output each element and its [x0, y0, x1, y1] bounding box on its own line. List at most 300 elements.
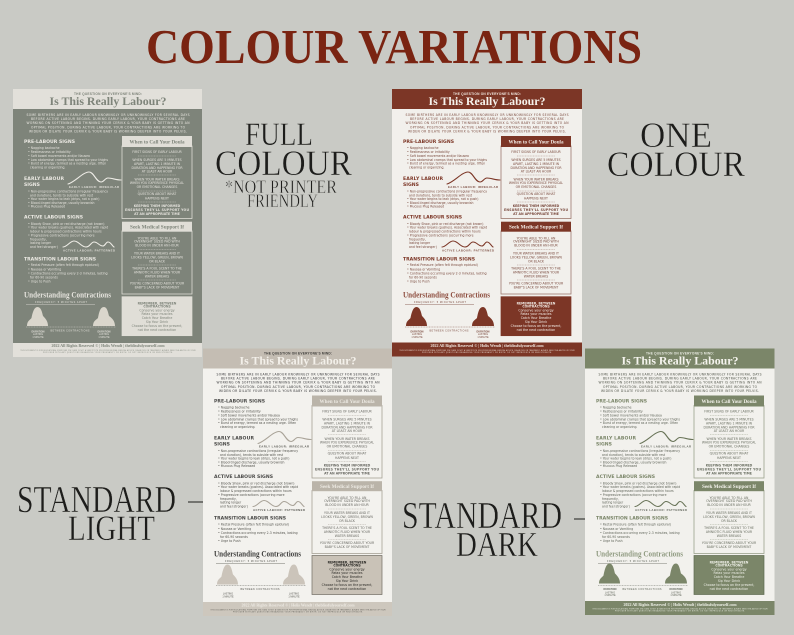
when to call your doula box: WHEN YOU EXPERIENCE PHYSICAL: [130, 181, 184, 185]
when to call your doula box: When to Call Your Doula: [130, 139, 185, 145]
panel: full colour poster: [13, 89, 202, 357]
transition labour signs: • Urge to Push: [218, 539, 241, 543]
remember callout: Relax your muscles: [714, 571, 745, 575]
active labour signs: • Progressive contractions (occurring more: [407, 233, 474, 237]
seek medical support box: BLOOD IN UNDER AN HOUR: [135, 244, 180, 248]
active labour signs: [24, 215, 115, 253]
understanding contractions diagram: DURATION: [476, 330, 490, 333]
transition labour signs: • Rectal Pressure (often felt through epidural): [600, 522, 671, 526]
intro text: OPTIMAL POSITION. DURING ACTIVE LABOUR, YOUR CONTRACTIONS ARE WORKING TO: [603, 385, 758, 389]
remember callout: Catch Your Breathe: [332, 575, 362, 579]
seek medical support box: YOU'RE CONCERNED ABOUT YOUR: [702, 541, 757, 545]
when to call your doula box: QUESTION ABOUT WHAT: [710, 452, 748, 456]
transition labour signs: • Urge to Push: [407, 279, 430, 283]
when to call your doula box: KEEPING THEM INFORMED: [706, 464, 753, 468]
pre-labour signs: • Low abdominal cramps that spread to your thighs: [407, 158, 487, 162]
pre-labour signs: cleaning or organizing.: [602, 425, 637, 429]
seek medical support box: BABY'S LACK OF MOVEMENT: [325, 545, 369, 549]
pre-labour signs: • Soft bowel movements and/or Nausea: [407, 154, 469, 158]
remember callout: Relax your muscles: [142, 312, 173, 316]
pre-labour signs: PRE-LABOUR SIGNS: [24, 139, 75, 145]
pre-labour signs: • Nagging backache: [407, 146, 439, 150]
early labour signs: SIGNS: [403, 182, 419, 188]
remember callout: Sip Your Drink: [718, 579, 740, 583]
understanding contractions diagram: 1 MINUTE: [98, 336, 110, 339]
transition labour signs: TRANSITION LABOUR SIGNS: [403, 257, 475, 263]
when to call your doula box: FIRST SIGNS OF EARLY LABOUR: [322, 410, 373, 414]
early labour signs: EARLY LABOUR: [24, 176, 64, 182]
seek medical support box: BABY'S LACK OF MOVEMENT: [135, 286, 179, 290]
understanding contractions diagram: 1 MINUTE: [222, 596, 234, 598]
active labour signs: • Bloody Show, pink or red discharge (not brown): [407, 222, 484, 226]
pre-labour signs: [214, 398, 298, 429]
when to call your doula box: OR EMOTIONAL CHANGES: [709, 444, 749, 448]
seek medical support box: OVERNIGHT SIZED PAD WITH: [706, 499, 753, 503]
active labour signs: labour & progressed contractions within hours: [409, 230, 481, 234]
understanding contractions diagram: DURATION: [410, 330, 424, 333]
remember callout: not the next contraction: [517, 328, 555, 332]
seek medical support box: BLOOD IN UNDER AN HOUR: [325, 503, 370, 507]
seek medical support box: AMNIOTIC FLUID WHEN YOUR: [706, 530, 753, 534]
footer: 2022 All Rights Reserved © | Holis Wendt | theblissfulyourself.com: [623, 602, 737, 607]
early labour signs: SIGNS: [596, 442, 612, 448]
early labour signs: • Non-progressive contractions (irregular frequency: [407, 189, 487, 193]
active labour signs: and feel stronger): [30, 245, 58, 249]
when to call your doula box: When to Call Your Doula: [508, 139, 564, 145]
when to call your doula box: OR EMOTIONAL CHANGES: [137, 185, 177, 189]
remember callout: not the next contraction: [328, 587, 366, 591]
footer: PROVIDER WITH ANY QUESTIONS REGARDING YOUR PREGNANCY OR BIRTH. DO NOT REPRODUCE OR REDISTRIBUTE.: [615, 610, 746, 612]
seek medical support box: THERE'S A FOUL SCENT TO THE: [703, 526, 754, 530]
pre-labour signs: • Restlessness or irritability: [28, 150, 71, 154]
intro text: WORKING ON SOFTENING AND THINNING YOUR CERVIX & YOUR BABY IS GETTING INTO AN: [406, 121, 568, 125]
label: full colour: [215, 117, 352, 212]
transition labour signs: • Urge to Push: [28, 279, 51, 283]
pre-labour signs: cleaning or organizing.: [220, 425, 255, 429]
transition labour signs: • Contractions occurring every 2-3 minutes, lasting: [28, 271, 108, 275]
transition labour signs: TRANSITION LABOUR SIGNS: [596, 516, 668, 522]
understanding contractions diagram: LASTING: [223, 593, 233, 596]
when to call your doula box: HAPPENS NEXT: [335, 456, 359, 460]
seek medical support box: LOOKS YELLOW, GREEN, BROWN: [510, 255, 562, 259]
poster heading: THE QUESTION ON EVERYONE'S MIND:: [646, 352, 714, 356]
understanding contractions diagram: LASTING: [671, 591, 681, 594]
transition labour signs: [403, 257, 487, 283]
footer: [592, 602, 768, 612]
remember callout: Conserve your energy: [518, 308, 554, 312]
early labour signs: [214, 432, 311, 468]
intro text: WORKING ON SOFTENING AND THINNING YOUR CERVIX & YOUR BABY IS GETTING INTO AN: [216, 380, 380, 384]
transition labour signs: • Urge to Push: [600, 539, 623, 543]
intro text: [598, 372, 762, 393]
pre-labour signs: • Nagging backache: [600, 406, 632, 410]
active labour signs: labour & progressed contractions within hours: [220, 489, 292, 493]
when to call your doula box: [312, 396, 382, 478]
transition labour signs: • Nausea or Vomiting: [600, 527, 633, 531]
footer: THIS DOCUMENT IS FOR EDUCATIONAL PURPOSES ONLY AND IS NOT A SUBSTITUTE FOR PROFESSIONAL MEDICAL ADVICE, DIAGNOSIS OR TREATMENT. ALWAYS SEEK THE ADVICE OF YOUR: [592, 608, 768, 610]
footer: 2022 All Rights Reserved © | Holis Wendt | theblissfulyourself.com: [51, 343, 165, 348]
remember callout: Choose to focus on the present,: [132, 324, 182, 328]
early labour signs: [596, 432, 693, 468]
transition labour signs: TRANSITION LABOUR SIGNS: [24, 257, 96, 263]
active labour signs: • Your water breaks (gushes). Associated with rapid: [407, 226, 487, 230]
footer: [20, 343, 196, 354]
pre-labour signs: cleaning or organizing.: [409, 165, 444, 169]
understanding contractions diagram: 1 MINUTE: [32, 336, 44, 339]
pre-labour signs: • Burst of energy, termed as a nesting urge. Often: [600, 421, 678, 425]
when to call your doula box: When to Call Your Doula: [702, 399, 757, 405]
seek medical support box: YOU'RE ABLE TO FILL AN: [138, 236, 177, 240]
seek medical support box: THERE'S A FOUL SCENT TO THE: [510, 266, 561, 270]
footer: PROVIDER WITH ANY QUESTIONS REGARDING YOUR PREGNANCY OR BIRTH. DO NOT REPRODUCE OR REDISTRIBUTE.: [422, 351, 553, 354]
label: one colour: COLOUR: [607, 144, 745, 184]
active labour signs: frequently,: [220, 497, 237, 501]
when to call your doula box: AT AN APPROPRIATE TIME: [134, 212, 180, 216]
seek medical support box: WATER BREAKS: [145, 274, 169, 278]
intro text: SOME BIRTHERS ARE IN EARLY LABOUR KNOWINGLY OR UNKNOWINGLY FOR SEVERAL DAYS: [598, 372, 762, 376]
understanding contractions diagram: DURATION: [669, 588, 683, 591]
when to call your doula box: [501, 136, 571, 218]
seek medical support box: YOU'RE ABLE TO FILL AN: [328, 496, 367, 500]
early labour signs: EARLY LABOUR: [214, 436, 254, 442]
when to call your doula box: ENSURES THEY'LL SUPPORT YOU: [125, 208, 189, 212]
when to call your doula box: WHEN SURGES ARE 5 MINUTES: [511, 158, 561, 162]
remember callout: [312, 556, 382, 594]
understanding contractions diagram: 1 MINUTE: [411, 336, 423, 339]
active labour signs: • Progressive contractions (occurring more: [218, 493, 285, 497]
early labour signs: and duration), tends to subside with rest: [409, 193, 473, 197]
intro text: WIDEN OR DILATE YOUR CERVIX & YOUR BABY IS WORKING DEEPER INTO YOUR PELVIS.: [29, 129, 187, 133]
when to call your doula box: APART, LASTING 1 MINUTE IN: [134, 162, 181, 166]
when to call your doula box: AT AN APPROPRIATE TIME: [324, 472, 370, 476]
label: standard dark: [402, 495, 590, 564]
poster heading: Is This Really Labour?: [50, 96, 167, 108]
when to call your doula box: [122, 136, 192, 218]
label: standard light: [17, 479, 203, 548]
when to call your doula box: AT LEAST AN HOUR: [332, 429, 363, 433]
when to call your doula box: [694, 396, 764, 478]
understanding contractions diagram: DURATION: [97, 330, 111, 333]
active labour signs: and feel stronger): [409, 245, 437, 249]
remember callout: [694, 556, 764, 594]
active labour signs: • Bloody Show, pink or red discharge (not brown): [218, 482, 295, 486]
intro text: BEFORE ACTIVE LABOUR BEGINS. DURING EARLY LABOUR, YOUR CONTRACTIONS ARE: [410, 117, 564, 121]
seek medical support box: [694, 481, 764, 554]
panel: standard dark poster: [585, 348, 774, 615]
intro text: BEFORE ACTIVE LABOUR BEGINS. DURING EARLY LABOUR, YOUR CONTRACTIONS ARE: [31, 117, 185, 121]
remember callout: Conserve your energy: [139, 308, 175, 312]
early labour signs: • Your water begins to leak (drips, not a gush): [28, 197, 99, 201]
early labour signs: and duration), tends to subside with rest: [602, 453, 666, 457]
seek medical support box: LOOKS YELLOW, GREEN, BROWN: [321, 515, 373, 519]
when to call your doula box: KEEPING THEM INFORMED: [324, 464, 371, 468]
when to call your doula box: HAPPENS NEXT: [717, 456, 741, 460]
remember callout: CONTRACTIONS: [143, 305, 171, 309]
seek medical support box: [312, 481, 382, 554]
pre-labour signs: • Low abdominal cramps that spread to your thighs: [218, 418, 298, 422]
label: standard light: STANDARD: [17, 479, 176, 521]
when to call your doula box: ENSURES THEY'LL SUPPORT YOU: [315, 468, 379, 472]
understanding contractions diagram: FREQUENCY: 5 MINUTES APART: [607, 560, 660, 563]
remember callout: Conserve your energy: [329, 568, 365, 572]
pre-labour signs: • Burst of energy, termed as a nesting urge. Often: [407, 162, 485, 166]
when to call your doula box: WHEN SURGES ARE 5 MINUTES: [132, 158, 182, 162]
seek medical support box: BABY'S LACK OF MOVEMENT: [707, 545, 751, 549]
pre-labour signs: • Nagging backache: [28, 146, 60, 150]
seek medical support box: YOUR WATER BREAKS AND IT: [134, 251, 180, 255]
transition labour signs: [596, 516, 680, 543]
seek medical support box: BLOOD IN UNDER AN HOUR: [514, 244, 559, 248]
early labour signs: SIGNS: [214, 442, 230, 448]
seek medical support box: AMNIOTIC FLUID WHEN YOUR: [513, 270, 560, 274]
remember callout: CONTRACTIONS: [522, 305, 550, 309]
intro text: [216, 372, 380, 393]
intro text: WORKING ON SOFTENING AND THINNING YOUR CERVIX & YOUR BABY IS GETTING INTO AN: [26, 121, 190, 125]
panel: one colour poster: [392, 89, 582, 356]
pre-labour signs: [596, 398, 680, 429]
label: full colour: *NOT PRINTER: [225, 177, 337, 198]
when to call your doula box: ENSURES THEY'LL SUPPORT YOU: [504, 208, 568, 212]
label: standard dark: STANDARD: [402, 495, 562, 537]
when to call your doula box: WHEN SURGES ARE 5 MINUTES: [322, 418, 372, 422]
transition labour signs: TRANSITION LABOUR SIGNS: [214, 516, 286, 522]
understanding contractions diagram: BETWEEN CONTRACTIONS: [240, 588, 280, 591]
early labour signs: • Your water begins to leak (drips, not a gush): [600, 456, 671, 460]
footer: PROVIDER WITH ANY QUESTIONS REGARDING YOUR PREGNANCY OR BIRTH. DO NOT REPRODUCE OR REDISTRIBUTE.: [233, 610, 364, 613]
transition labour signs: • Rectal Pressure (often felt through epidural): [218, 522, 289, 526]
active labour signs: ACTIVE LABOUR SIGNS: [403, 215, 462, 221]
intro text: WORKING ON SOFTENING AND THINNING YOUR CERVIX & YOUR BABY IS GETTING INTO AN: [598, 380, 762, 384]
when to call your doula box: WHEN YOUR WATER BREAKS: [135, 177, 179, 181]
active labour signs: frequently,: [409, 237, 426, 241]
when to call your doula box: FIRST SIGNS OF EARLY LABOUR: [511, 150, 562, 154]
seek medical support box: YOU'RE ABLE TO FILL AN: [517, 236, 556, 240]
remember callout: Catch Your Breathe: [521, 316, 551, 320]
active labour signs: labour & progressed contractions within hours: [602, 489, 674, 493]
pre-labour signs: • Burst of energy, termed as a nesting urge. Often: [218, 421, 296, 425]
label: one colour: ONE: [640, 115, 712, 155]
seek medical support box: OR BLACK: [149, 259, 166, 263]
when to call your doula box: DURATION AND HAPPENING FOR: [703, 426, 755, 430]
when to call your doula box: DURATION AND HAPPENING FOR: [131, 166, 183, 170]
remember callout: Sip Your Drink: [146, 320, 168, 324]
transition labour signs: [24, 257, 108, 283]
intro text: SOME BIRTHERS ARE IN EARLY LABOUR KNOWINGLY OR UNKNOWINGLY FOR SEVERAL DAYS: [216, 372, 380, 376]
seek medical support box: Seek Medical Support If: [509, 225, 563, 231]
seek medical support box: BLOOD IN UNDER AN HOUR: [707, 503, 752, 507]
remember callout: Choose to focus on the present,: [704, 583, 754, 587]
active labour signs: • Your water breaks (gushes). Associated with rapid: [218, 485, 298, 489]
active labour signs: [214, 474, 305, 512]
understanding contractions diagram: FREQUENCY: 5 MINUTES APART: [414, 301, 467, 304]
poster heading: THE QUESTION ON EVERYONE'S MIND:: [453, 92, 521, 96]
when to call your doula box: QUESTION ABOUT WHAT: [517, 192, 555, 196]
early labour signs: • Blood-tinged discharge, usually brownish: [28, 201, 95, 205]
seek medical support box: YOU'RE ABLE TO FILL AN: [710, 496, 749, 500]
understanding contractions diagram: BETWEEN CONTRACTIONS: [622, 588, 662, 591]
understanding contractions diagram: [403, 290, 495, 339]
seek medical support box: OVERNIGHT SIZED PAD WITH: [513, 240, 560, 244]
label: standard dark: DARK: [456, 525, 538, 564]
when to call your doula box: OR EMOTIONAL CHANGES: [516, 185, 556, 189]
when to call your doula box: APART, LASTING 1 MINUTE IN: [324, 422, 371, 426]
seek medical support box: YOUR WATER BREAKS AND IT: [513, 251, 559, 255]
footer: THIS DOCUMENT IS FOR EDUCATIONAL PURPOSES ONLY AND IS NOT A SUBSTITUTE FOR PROFESSIONAL MEDICAL ADVICE, DIAGNOSIS OR TREATMENT. ALWAYS SEEK THE ADVICE OF YOUR: [400, 349, 575, 352]
when to call your doula box: WHEN SURGES ARE 5 MINUTES: [704, 418, 754, 422]
footer: 2022 All Rights Reserved © | Holis Wendt | theblissfulyourself.com: [430, 343, 544, 348]
early labour signs: • Blood-tinged discharge, usually brownish: [407, 201, 474, 205]
active labour signs: and feel stronger): [602, 504, 630, 508]
label: full colour: FRIENDLY: [247, 191, 318, 212]
early labour signs: EARLY LABOUR: IRREGULAR: [448, 185, 498, 189]
understanding contractions diagram: LASTING: [412, 333, 422, 336]
seek medical support box: Seek Medical Support If: [130, 225, 184, 231]
active labour signs: lasting longer: [409, 241, 431, 245]
pre-labour signs: • Soft bowel movements and/or Nausea: [28, 154, 90, 158]
early labour signs: • Non-progressive contractions (irregular frequency: [600, 449, 680, 453]
early labour signs: EARLY LABOUR: [403, 176, 443, 182]
early labour signs: • Your water begins to leak (drips, not a gush): [218, 456, 289, 460]
transition labour signs: for 60-90 seconds: [30, 275, 58, 279]
active labour signs: frequently,: [602, 497, 619, 501]
pre-labour signs: • Nagging backache: [218, 406, 250, 410]
footer: [400, 343, 575, 354]
intro text: [406, 113, 569, 133]
footer: 2022 All Rights Reserved © | Holis Wendt | theblissfulyourself.com: [241, 602, 355, 608]
active labour signs: ACTIVE LABOUR SIGNS: [214, 474, 273, 480]
when to call your doula box: HAPPENS NEXT: [524, 196, 548, 200]
early labour signs: • Your water begins to leak (drips, not a gush): [407, 197, 478, 201]
poster heading: Is This Really Labour?: [240, 356, 357, 368]
pre-labour signs: • Restlessness or irritability: [218, 410, 261, 414]
remember callout: REMEMBER, BETWEEN: [710, 560, 749, 564]
pre-labour signs: PRE-LABOUR SIGNS: [596, 398, 647, 404]
active labour signs: labour & progressed contractions within hours: [30, 230, 102, 234]
active labour signs: [403, 215, 494, 253]
early labour signs: • Non-progressive contractions (irregular frequency: [218, 449, 298, 453]
when to call your doula box: WHEN YOUR WATER BREAKS: [514, 177, 558, 181]
seek medical support box: YOU'RE CONCERNED ABOUT YOUR: [320, 541, 375, 545]
active labour signs: ACTIVE LABOUR: PATTERNED: [635, 508, 687, 512]
seek medical support box: WATER BREAKS: [335, 534, 359, 538]
seek medical support box: WATER BREAKS: [524, 274, 548, 278]
transition labour signs: for 60-90 seconds: [220, 535, 248, 539]
seek medical support box: AMNIOTIC FLUID WHEN YOUR: [134, 270, 181, 274]
understanding contractions diagram: LASTING: [33, 333, 43, 336]
understanding contractions diagram: 1 MINUTE: [288, 596, 300, 598]
early labour signs: • Blood-tinged discharge, usually brownish: [218, 460, 285, 464]
active labour signs: • Your water breaks (gushes). Associated with rapid: [28, 226, 108, 230]
pre-labour signs: • Soft bowel movements and/or Nausea: [218, 414, 280, 418]
label: one colour: [607, 115, 745, 184]
when to call your doula box: QUESTION ABOUT WHAT: [138, 192, 176, 196]
intro text: BEFORE ACTIVE LABOUR BEGINS. DURING EARLY LABOUR, YOUR CONTRACTIONS ARE: [603, 376, 757, 380]
understanding contractions diagram: LASTING: [605, 591, 615, 594]
seek medical support box: [122, 222, 192, 294]
intro text: OPTIMAL POSITION. DURING ACTIVE LABOUR, YOUR CONTRACTIONS ARE WORKING TO: [410, 125, 565, 129]
early labour signs: [24, 172, 121, 209]
footer: [210, 602, 386, 613]
remember callout: Sip Your Drink: [525, 320, 547, 324]
pre-labour signs: PRE-LABOUR SIGNS: [214, 398, 265, 404]
early labour signs: • Mucous Plug Released: [28, 205, 65, 209]
seek medical support box: THERE'S A FOUL SCENT TO THE: [131, 266, 182, 270]
seek medical support box: YOUR WATER BREAKS AND IT: [324, 511, 370, 515]
when to call your doula box: FIRST SIGNS OF EARLY LABOUR: [704, 410, 755, 414]
active labour signs: • Progressive contractions (occurring more: [28, 233, 95, 237]
early labour signs: EARLY LABOUR: IRREGULAR: [259, 444, 309, 448]
when to call your doula box: DURATION AND HAPPENING FOR: [510, 166, 562, 170]
intro text: [26, 113, 190, 133]
transition labour signs: • Rectal Pressure (often felt through epidural): [28, 263, 99, 267]
seek medical support box: OR BLACK: [339, 519, 356, 523]
when to call your doula box: AT AN APPROPRIATE TIME: [513, 212, 559, 216]
remember callout: CONTRACTIONS: [715, 564, 743, 568]
active labour signs: ACTIVE LABOUR: PATTERNED: [253, 508, 305, 512]
early labour signs: [403, 172, 500, 209]
transition labour signs: • Nausea or Vomiting: [28, 267, 61, 271]
when to call your doula box: KEEPING THEM INFORMED: [134, 204, 181, 208]
remember callout: [122, 297, 192, 336]
when to call your doula box: WHEN YOUR WATER BREAKS: [707, 437, 751, 441]
intro text: SOME BIRTHERS ARE IN EARLY LABOUR KNOWINGLY OR UNKNOWINGLY FOR SEVERAL DAYS: [406, 113, 569, 117]
active labour signs: • Bloody Show, pink or red discharge (not brown): [28, 222, 105, 226]
when to call your doula box: WHEN YOU EXPERIENCE PHYSICAL: [320, 440, 374, 444]
intro text: BEFORE ACTIVE LABOUR BEGINS. DURING EARLY LABOUR, YOUR CONTRACTIONS ARE: [221, 376, 375, 380]
when to call your doula box: AT LEAST AN HOUR: [521, 169, 552, 173]
understanding contractions diagram: [214, 548, 306, 598]
when to call your doula box: FIRST SIGNS OF EARLY LABOUR: [132, 150, 183, 154]
active labour signs: ACTIVE LABOUR SIGNS: [24, 215, 83, 221]
remember callout: not the next contraction: [710, 587, 748, 591]
pre-labour signs: • Burst of energy, termed as a nesting urge. Often: [28, 162, 106, 166]
remember callout: Choose to focus on the present,: [322, 583, 372, 587]
understanding contractions diagram: LASTING: [99, 333, 109, 336]
transition labour signs: • Nausea or Vomiting: [407, 267, 440, 271]
when to call your doula box: AT LEAST AN HOUR: [142, 169, 173, 173]
understanding contractions diagram: 1 MINUTE: [604, 594, 616, 597]
label: full colour: COLOUR: [215, 143, 352, 183]
transition labour signs: for 60-90 seconds: [409, 275, 437, 279]
early labour signs: EARLY LABOUR: IRREGULAR: [641, 444, 691, 448]
transition labour signs: for 60-90 seconds: [602, 535, 630, 539]
when to call your doula box: When to Call Your Doula: [320, 399, 375, 405]
active labour signs: and feel stronger): [220, 504, 248, 508]
when to call your doula box: HAPPENS NEXT: [145, 196, 169, 200]
intro text: WIDEN OR DILATE YOUR CERVIX & YOUR BABY IS WORKING DEEPER INTO YOUR PELVIS.: [219, 389, 377, 393]
early labour signs: • Blood-tinged discharge, usually brownish: [600, 460, 667, 464]
seek medical support box: YOU'RE CONCERNED ABOUT YOUR: [509, 282, 564, 286]
when to call your doula box: WHEN YOU EXPERIENCE PHYSICAL: [509, 181, 563, 185]
understanding contractions diagram: Understanding Contractions: [214, 548, 302, 558]
seek medical support box: [501, 222, 571, 294]
transition labour signs: • Contractions occurring every 2-3 minutes, lasting: [600, 531, 680, 535]
seek medical support box: BABY'S LACK OF MOVEMENT: [514, 286, 558, 290]
early labour signs: • Mucous Plug Released: [600, 464, 637, 468]
intro text: SOME BIRTHERS ARE IN EARLY LABOUR KNOWINGLY OR UNKNOWINGLY FOR SEVERAL DAYS: [26, 113, 190, 117]
remember callout: not the next contraction: [138, 328, 176, 332]
understanding contractions diagram: Understanding Contractions: [403, 290, 491, 300]
when to call your doula box: KEEPING THEM INFORMED: [513, 204, 560, 208]
when to call your doula box: OR EMOTIONAL CHANGES: [327, 444, 367, 448]
when to call your doula box: APART, LASTING 1 MINUTE IN: [513, 162, 560, 166]
seek medical support box: WATER BREAKS: [717, 534, 741, 538]
seek medical support box: YOU'RE CONCERNED ABOUT YOUR: [130, 282, 185, 286]
seek medical support box: OR BLACK: [721, 519, 738, 523]
understanding contractions diagram: 1 MINUTE: [670, 594, 682, 597]
remember callout: Choose to focus on the present,: [511, 324, 561, 328]
label: standard light: LIGHT: [68, 508, 155, 548]
